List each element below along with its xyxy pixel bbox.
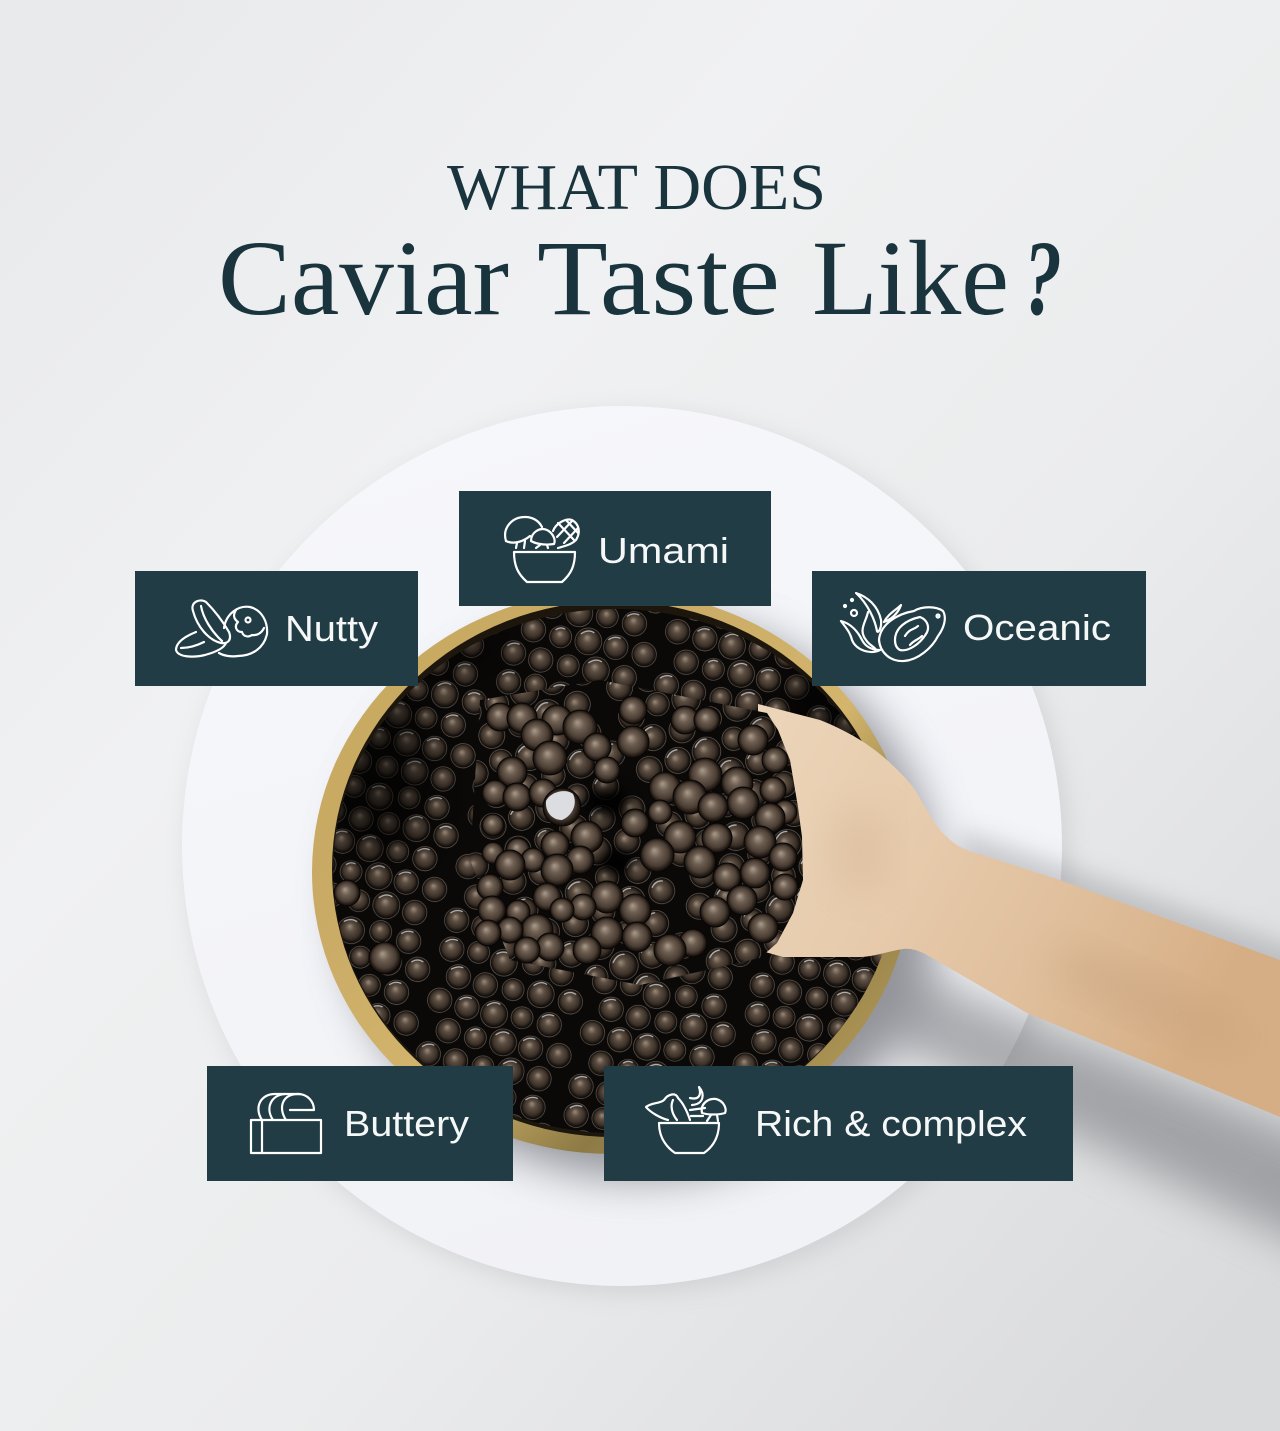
caviar bed — [333, 609, 897, 1133]
icon: mushrooms in bowl — [505, 517, 579, 582]
label: Oceanic — [963, 607, 1111, 648]
plate shadow — [188, 413, 1068, 1293]
tin inner wall — [332, 601, 896, 1137]
panel: buttery — [207, 1066, 513, 1181]
icon: butter block — [251, 1094, 321, 1153]
icon: nuts — [176, 600, 267, 657]
wooden spoon shadows — [880, 830, 1280, 1290]
caviar beads on mound — [334, 696, 798, 974]
caviar tin with caviar and spoon — [312, 590, 1280, 1154]
caviar mound — [470, 680, 803, 985]
darker shaded caviar areas — [320, 620, 875, 860]
title line 2: Taste — [537, 220, 780, 338]
title line 2: Like — [812, 220, 1009, 338]
caviar tin shadow — [342, 614, 938, 1178]
wooden spoon — [758, 704, 1280, 1117]
gold tin rim — [312, 590, 912, 1154]
icon: salad bowl — [646, 1087, 726, 1153]
dark hollows in caviar — [586, 787, 634, 875]
panel: nutty — [135, 571, 418, 686]
white plate — [182, 406, 1062, 1286]
label: Rich & complex — [755, 1103, 1027, 1144]
icon: seaweed and oyster — [841, 593, 945, 661]
title line 2: ? — [1024, 220, 1062, 338]
label: Umami — [598, 530, 729, 571]
label: Nutty — [285, 608, 378, 649]
label: Buttery — [344, 1103, 469, 1144]
bright highlight bead — [546, 791, 575, 820]
panel: rich and complex — [604, 1066, 1073, 1181]
title line 1: WHAT DOES — [447, 151, 826, 224]
title — [218, 151, 1062, 338]
panel: oceanic — [812, 571, 1146, 686]
spoon wood shading — [830, 805, 1260, 1067]
title line 2: Caviar — [218, 220, 509, 338]
panel: umami — [459, 491, 771, 606]
